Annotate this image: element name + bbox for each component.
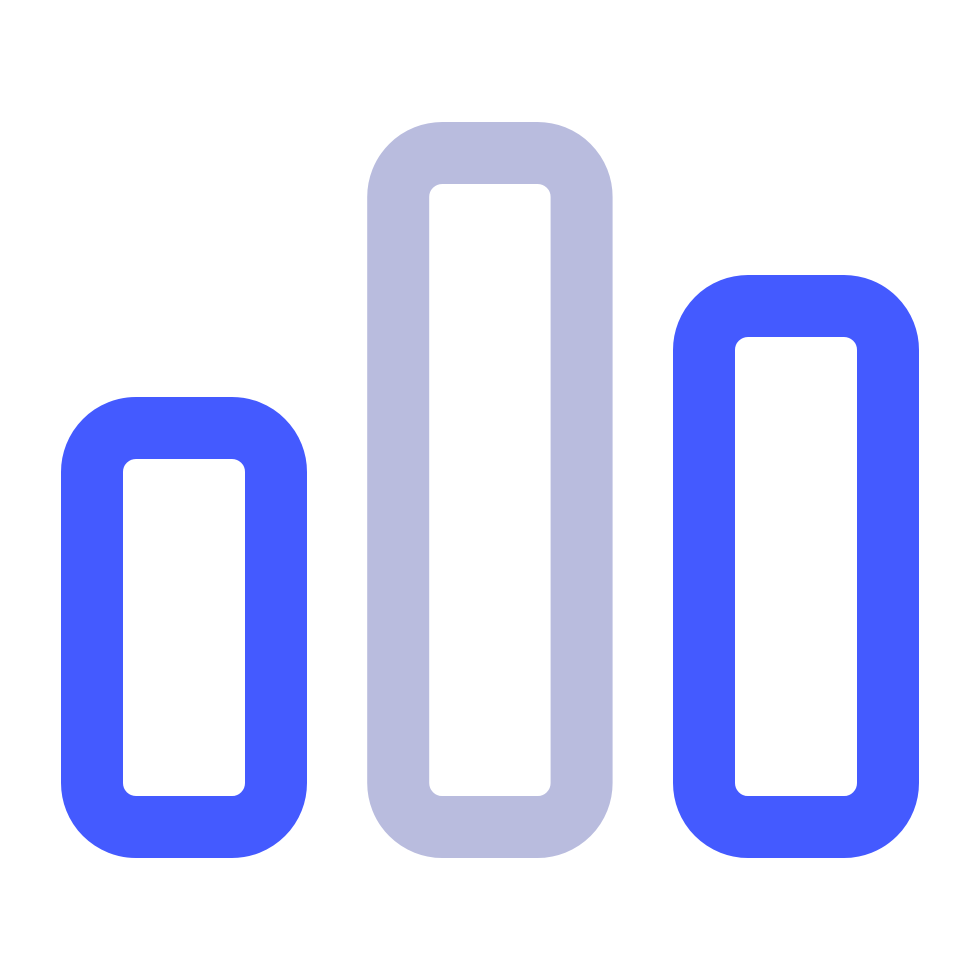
middle bar xyxy=(398,153,582,827)
left bar xyxy=(92,428,276,827)
right bar xyxy=(704,306,888,827)
